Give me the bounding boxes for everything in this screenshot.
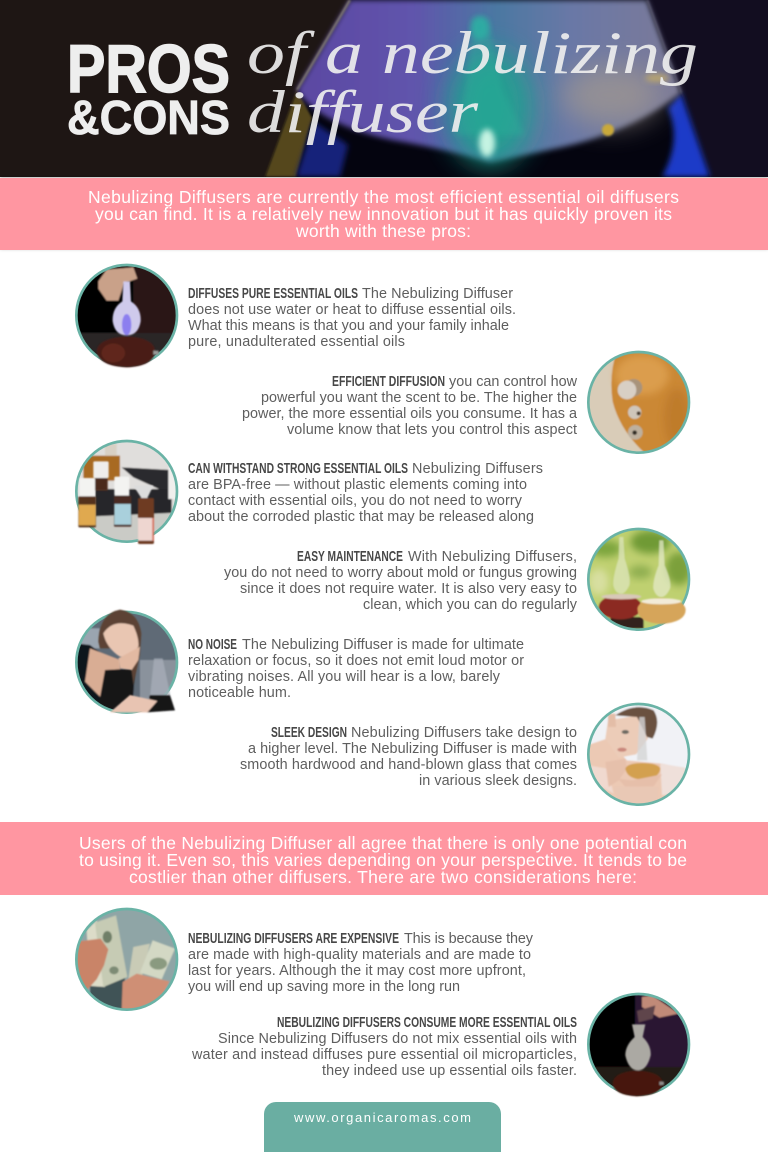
cons intro text [79,833,687,887]
photo: diffuser with hand [75,264,178,368]
text block: powerful you want the scent to be. The higher the [261,390,577,406]
text block: NO NOISE [188,636,237,653]
text block: contact with essential oils, you do not need to worry [188,493,523,509]
text block: What this means is that you and your family inhale [188,318,509,334]
photo: two diffusers on green [587,528,690,631]
text block: vibrating noises. All you will hear is a low, barely [188,669,501,685]
text block: Nebulizing Diffusers [412,461,543,477]
text block: EFFICIENT DIFFUSION [332,373,445,390]
photo: wooden base with knobs [587,350,690,454]
cons intro text: Users of the Nebulizing Diffuser all agree that there is only one potential con [79,833,687,853]
text block: since it does not require water. It is also very easy to [240,581,577,597]
pro 4: easy maintenance [224,528,690,631]
text block: in various sleek designs. [419,773,577,789]
text block: relaxation or focus, so it does not emit loud motor or [188,653,524,669]
text block: you do not need to worry about mold or fungus growing [224,565,577,581]
text block: power, the more essential oils you consume. It has a [242,406,577,422]
text block: SLEEK DESIGN [271,724,347,741]
footer website tab [264,1102,501,1152]
hero banner [0,0,768,177]
text block: noticeable hum. [188,685,291,701]
intro text: Nebulizing Diffusers are currently the most efficient essential oil diffusers [88,187,679,207]
title: pros and cons: PROS [67,31,230,107]
text block: a higher level. The Nebulizing Diffuser is made with [248,741,577,757]
title: pros and cons: &CONS [67,92,230,145]
intro text: you can find. It is a relatively new innovation but it has quickly proven its [95,204,672,224]
text block: clean, which you can do regularly [363,597,578,613]
title: of a nebulizing diffuser: of a nebulizing [247,20,698,86]
pink cons band [0,822,768,895]
text block: This is because they [404,931,534,947]
intro text: worth with these pros: [295,221,471,241]
pro 3: can withstand strong essential oils [70,434,543,549]
text block [240,724,577,789]
photo: woman holding diffuser [587,702,690,806]
cons intro text: to using it. Even so, this varies depending on your perspective. It tends to be [79,850,687,870]
pro 5: no noise [70,605,524,720]
pro 2: efficient diffusion [242,350,690,454]
pro 1: diffuses pure essential oils [70,258,516,373]
text block [188,636,524,701]
photo: hands holding money [75,908,178,1011]
text block: Nebulizing Diffusers take design to [351,725,577,741]
text block: pure, unadulterated essential oils [188,334,405,350]
text block: volume know that lets you control this aspect [287,422,577,438]
text block: about the corroded plastic that may be released along [188,509,534,525]
text block: The Nebulizing Diffuser is made for ultimate [242,637,524,653]
text block: last for years. Although the it may cost more upfront, [188,963,526,979]
text block: smooth hardwood and hand-blown glass that comes [240,757,577,773]
text block: With Nebulizing Diffusers, [408,549,577,565]
text block [188,930,534,995]
website url: www.organicaromas.com [293,1110,471,1125]
text block: you can control how [449,374,578,390]
text block: NEBULIZING DIFFUSERS CONSUME MORE ESSENTIAL OILS [277,1014,577,1031]
text block: they indeed use up essential oils faster. [322,1063,577,1079]
title: of a nebulizing diffuser: diffuser [247,79,479,145]
text block [188,460,543,525]
text block: you will end up saving more in the long run [188,979,460,995]
text block [242,373,578,438]
text block: DIFFUSES PURE ESSENTIAL OILS [188,285,358,302]
con 1: expensive [75,908,533,1011]
pink intro band [0,178,768,250]
title: pros and cons [67,31,230,145]
title: of a nebulizing diffuser [247,20,698,145]
text block [188,285,516,350]
photo: woman relaxing by diffuser [75,608,178,714]
text block: Since Nebulizing Diffusers do not mix essential oils with [218,1031,577,1047]
text block: NEBULIZING DIFFUSERS ARE EXPENSIVE [188,930,399,947]
text block: are made with high-quality materials and are made to [188,947,531,963]
pro 6: sleek design [240,702,690,806]
photo: pouring oil into diffuser [587,992,690,1098]
text block: CAN WITHSTAND STRONG ESSENTIAL OILS [188,460,408,477]
text block [224,548,578,613]
cons intro text: costlier than other diffusers. There are two considerations here: [129,867,637,887]
photo: essential oil bottles [75,440,178,546]
text block: does not use water or heat to diffuse essential oils. [188,302,516,318]
text block [191,1014,577,1079]
text block: are BPA-free — without plastic elements coming into [188,477,527,493]
text block: EASY MAINTENANCE [297,548,403,565]
con 2: consume more oils [192,992,690,1098]
text block: water and instead diffuses pure essential oil microparticles, [191,1047,577,1063]
hero photo: glass diffuser [0,0,768,177]
intro text [88,187,679,241]
text block: The Nebulizing Diffuser [362,286,513,302]
